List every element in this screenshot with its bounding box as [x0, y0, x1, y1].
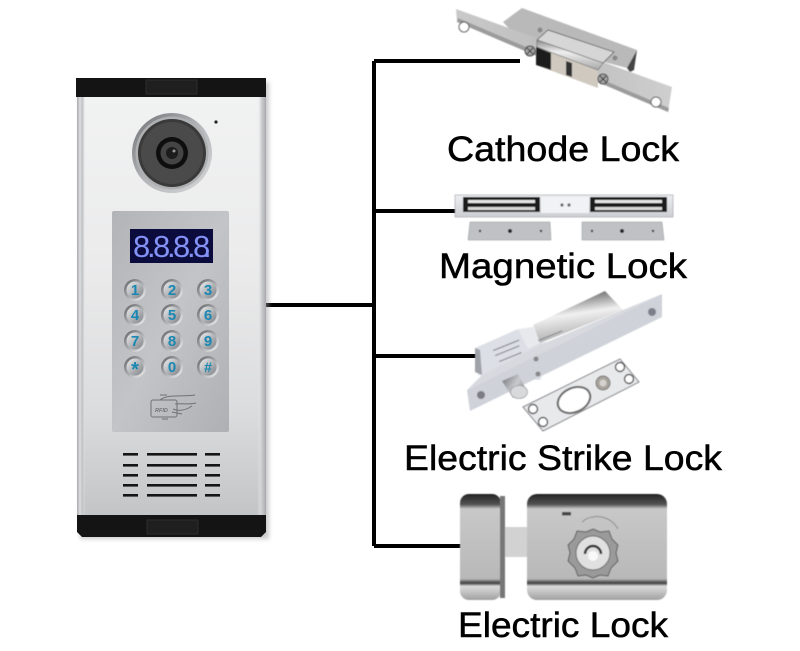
keypad buttons: 9 — [204, 333, 212, 350]
top black cap — [76, 78, 266, 97]
keypad buttons: 5 — [168, 307, 176, 324]
keypad buttons — [124, 279, 219, 381]
icon: electric lock — [460, 494, 667, 600]
icon: electric strike lock — [467, 291, 662, 431]
icon: cathode lock — [456, 8, 672, 112]
keypad buttons: # — [204, 359, 212, 375]
keypad buttons: 3 — [204, 282, 212, 299]
keypad buttons: * — [131, 359, 139, 381]
intercom door panel — [76, 78, 269, 539]
label: magnetic lock: Magnetic Lock — [439, 247, 688, 286]
RFID card icon: RFID — [155, 408, 168, 414]
LED display: 8.8.8.8. — [133, 229, 212, 264]
keypad buttons: 7 — [131, 333, 139, 350]
keypad buttons: 1 — [131, 282, 139, 299]
keypad buttons: 4 — [131, 307, 140, 324]
keypad buttons: 6 — [204, 307, 212, 324]
speaker slots — [123, 453, 220, 497]
camera — [132, 113, 212, 193]
keypad buttons: 0 — [168, 359, 176, 376]
label: cathode lock: Cathode Lock — [447, 130, 680, 169]
label: electric lock: Electric Lock — [458, 606, 669, 645]
keypad buttons: 2 — [168, 282, 176, 299]
keypad plate — [112, 211, 229, 432]
bottom black cap — [77, 515, 266, 537]
panel body — [77, 82, 269, 539]
microphone hole — [214, 120, 218, 124]
label: electric strike lock: Electric Strike Lock — [404, 439, 723, 478]
keypad buttons: 8 — [168, 333, 176, 350]
connection lines — [266, 61, 520, 546]
RFID card icon — [151, 395, 196, 419]
icon: magnetic lock — [455, 195, 673, 240]
